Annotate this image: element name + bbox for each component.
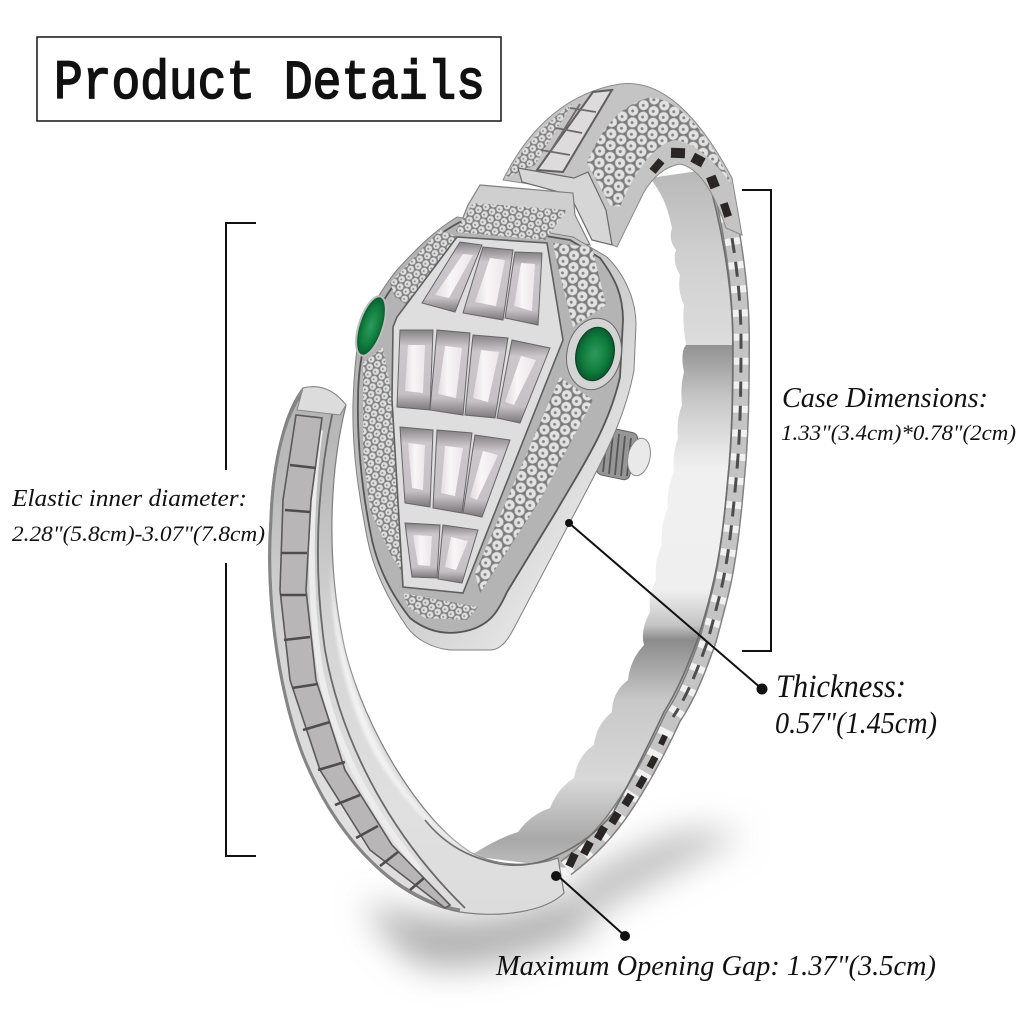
right bracket: case dimensions bbox=[742, 190, 771, 651]
title box: Product Details: Product Details bbox=[54, 52, 485, 115]
pave: right upper field bbox=[553, 243, 606, 327]
label: maximum opening gap: Maximum Opening Gap: 1.37"(3.5cm) bbox=[495, 950, 936, 982]
crown bbox=[595, 427, 654, 481]
label: thickness: 0.57"(1.45cm) bbox=[775, 705, 937, 740]
upper inner surface bbox=[650, 170, 741, 345]
pointer: opening gap bbox=[551, 871, 630, 941]
row 4 stones bbox=[405, 523, 478, 583]
pave: right lower field bbox=[475, 377, 593, 593]
left pave strip bbox=[505, 104, 572, 178]
row 2 stones bbox=[397, 330, 550, 423]
row 1 stones bbox=[422, 242, 542, 325]
watch head bbox=[350, 185, 654, 650]
hinge link bar bbox=[518, 168, 612, 245]
large pave field bbox=[587, 98, 732, 207]
left eye emerald bbox=[350, 293, 392, 359]
title box: Product Details bbox=[37, 37, 501, 121]
rim base edge bbox=[566, 168, 741, 868]
top link block bbox=[460, 185, 590, 245]
rim scale bumps bbox=[566, 168, 741, 868]
lower inner surface with scalloped edge bbox=[470, 345, 741, 868]
outer shell bbox=[353, 217, 636, 650]
rim inner edge bbox=[558, 172, 733, 855]
label: case dimensions bbox=[781, 382, 1016, 445]
right eye emerald bbox=[560, 313, 628, 395]
pave: lower left strip bbox=[363, 347, 407, 580]
face plate bbox=[358, 222, 623, 633]
baguette channel bbox=[537, 90, 612, 172]
rim top line bbox=[425, 820, 558, 865]
label: elastic inner diameter: 2.28"(5.8cm)-3.07"(7.8cm) bbox=[12, 521, 265, 546]
bangle: right side inner surface and rim bbox=[470, 168, 741, 868]
bright strip beside channel bbox=[312, 430, 420, 870]
pave: upper left strip bbox=[390, 230, 458, 305]
label: elastic inner diameter bbox=[11, 486, 265, 546]
rim slits bbox=[673, 168, 741, 717]
bangle: tail band bbox=[269, 387, 564, 914]
upper dark lugs bbox=[649, 148, 732, 218]
label: case dimensions: 1.33"(3.4cm)*0.78"(2cm) bbox=[781, 420, 1016, 445]
label: elastic inner diameter: Elastic inner diameter: bbox=[11, 486, 247, 512]
pave: bottom strip bbox=[403, 593, 478, 620]
label: thickness bbox=[775, 669, 937, 740]
channel stone lines bbox=[541, 104, 596, 155]
label: thickness: Thickness: bbox=[776, 669, 906, 705]
metal frame bbox=[392, 237, 563, 593]
row 3 stones bbox=[400, 427, 510, 517]
bangle: upper arc band bbox=[503, 83, 742, 247]
rim band bbox=[566, 168, 741, 868]
channel stone dividers bbox=[280, 465, 424, 890]
groove line bbox=[318, 410, 465, 908]
label: case dimensions: Case Dimensions: bbox=[782, 382, 988, 414]
baguette channel bbox=[280, 415, 450, 908]
left bracket: inner diameter bbox=[226, 223, 256, 856]
tail end cap bbox=[297, 387, 346, 415]
pave: top strip bbox=[455, 203, 567, 240]
pointer: thickness bbox=[565, 519, 768, 694]
lower dark lugs bbox=[565, 734, 668, 868]
bright streak on wide face bbox=[331, 560, 490, 862]
drop shadow under bangle bbox=[365, 830, 745, 968]
outer rim dark edge bbox=[270, 392, 460, 910]
